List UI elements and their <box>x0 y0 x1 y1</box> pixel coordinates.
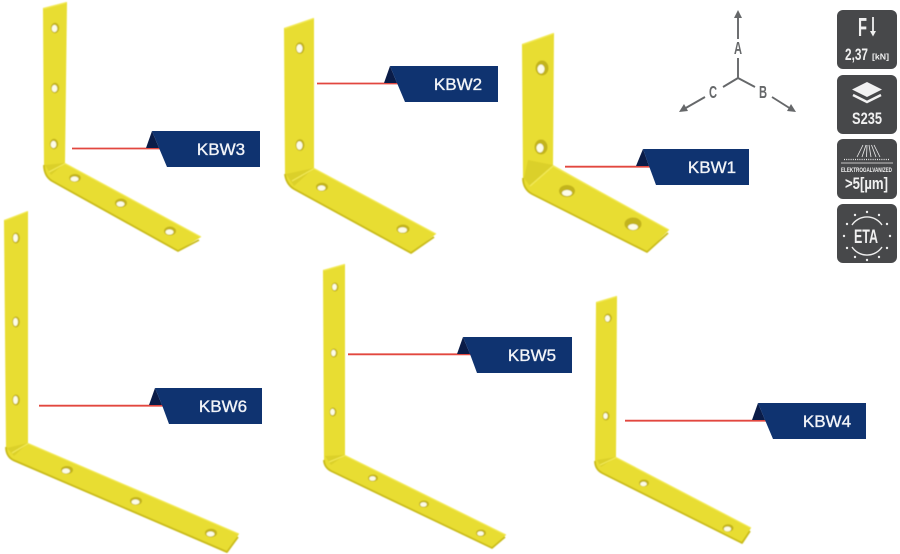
bracket KBW3 <box>43 2 201 251</box>
badge: steel grade S235 <box>837 75 897 134</box>
badge: electro-galvanized coating: >5[µm] <box>845 174 888 193</box>
callout: KBW3: KBW3 <box>197 140 245 159</box>
load direction axes diagram: A <box>734 38 742 59</box>
callout: KBW5: KBW5 <box>508 346 556 365</box>
callout: KBW3 <box>72 131 260 167</box>
badge: load capacity: F <box>858 12 867 42</box>
load direction axes diagram <box>679 10 796 112</box>
bracket KBW6 <box>4 211 239 553</box>
bracket KBW4 <box>595 296 751 543</box>
badge: load capacity <box>837 10 897 69</box>
load direction axes diagram: B <box>759 82 767 103</box>
load direction axes diagram: C <box>709 82 717 103</box>
bracket KBW5 <box>323 264 506 548</box>
callout: KBW5 <box>348 337 572 373</box>
callout: KBW4 <box>625 403 866 439</box>
badge: ETA certification: ETA <box>854 227 878 248</box>
badge: electro-galvanized coating <box>837 139 897 199</box>
badge: load capacity: [kN] <box>872 52 889 62</box>
callout: KBW6 <box>39 388 262 424</box>
callout: KBW1: KBW1 <box>688 158 736 177</box>
callout: KBW1 <box>565 149 749 185</box>
bracket KBW2 <box>284 18 436 253</box>
badge: ETA certification <box>837 204 897 263</box>
callout: KBW6: KBW6 <box>199 397 247 416</box>
callout: KBW2: KBW2 <box>434 75 482 94</box>
callout: KBW4: KBW4 <box>803 412 851 431</box>
bracket KBW1 <box>522 33 669 252</box>
badge: steel grade S235: S235 <box>852 109 882 128</box>
badge: load capacity: 2,37 <box>845 45 868 64</box>
callout: KBW2 <box>317 66 498 102</box>
